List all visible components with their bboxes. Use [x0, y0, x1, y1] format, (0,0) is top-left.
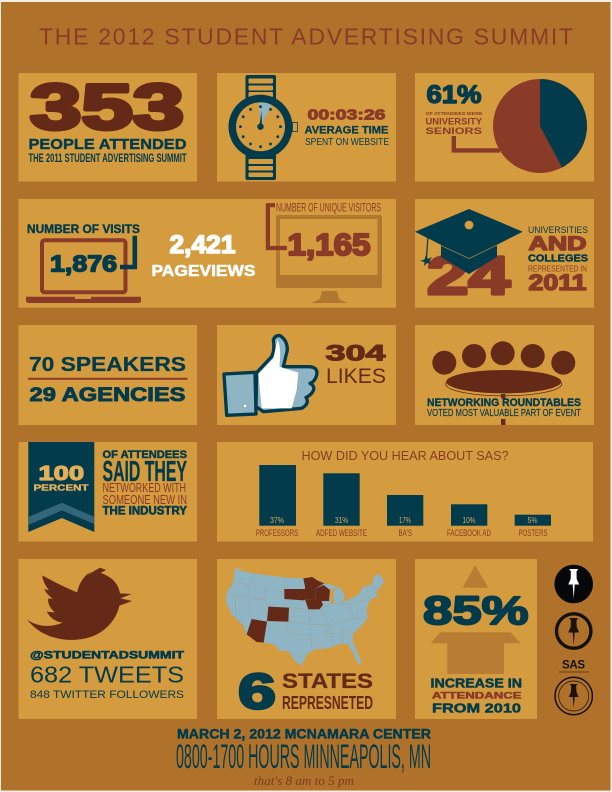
number of unique visitors: NUMBER OF UNIQUE VISITORS [276, 202, 381, 214]
someone new in: SOMEONE NEW IN [102, 493, 187, 507]
map: united states [226, 568, 384, 666]
icon: ring pin badge [556, 614, 591, 648]
icon: graduation cap [415, 209, 523, 274]
panel: attendance [18, 71, 197, 182]
bar: professors: 37% [270, 516, 284, 525]
and: AND [528, 234, 586, 255]
icon: laptop [26, 240, 141, 303]
bar: adfed website: 31% [335, 516, 348, 525]
panel: likes [217, 325, 396, 425]
sas label: SAS [562, 659, 585, 671]
footer: date and venue: MARCH 2, 2012 MCNAMARA CENTER [177, 726, 431, 741]
85 percent: 85% [423, 589, 528, 633]
icon: arrow body [431, 632, 521, 674]
likes: LIKES [326, 365, 386, 388]
said they: SAID THEY [102, 456, 187, 488]
percent: PERCENT [34, 482, 90, 492]
2011: 2011 [528, 270, 586, 295]
bar: ba's: BA'S [398, 528, 412, 538]
bar: ba's [387, 495, 423, 538]
spent on website: SPENT ON WEBSITE [305, 137, 389, 148]
from 2010: FROM 2010 [432, 700, 521, 715]
visits value: 1,876 [50, 250, 117, 276]
time value: 00:03:26 [308, 108, 386, 124]
twitter handle: @STUDENTADSUMMIT [30, 650, 184, 662]
bar: professors: PROFESSORS [256, 528, 298, 538]
title: THE 2012 STUDENT ADVERTISING SUMMIT [39, 24, 573, 50]
seniors: SENIORS [426, 126, 482, 137]
bar: posters: POSTERS [518, 528, 548, 538]
pointer bracket [454, 136, 500, 150]
footer: note: that's 8 am to 5 pm [254, 773, 354, 788]
panel: universities and colleges [415, 199, 594, 308]
number 24: 24 [427, 246, 510, 306]
icon: thumbs up [224, 336, 317, 415]
100: 100 [38, 463, 84, 485]
panel: twitter [18, 559, 197, 719]
represented in: REPRESENTED IN [528, 264, 587, 274]
pageviews value: 2,421 [170, 231, 236, 259]
chart title: HOW DID YOU HEAR ABOUT SAS? [302, 449, 509, 463]
icon: arrow tip [463, 565, 488, 588]
attendance: ATTENDANCE [432, 690, 522, 700]
pageviews label: PAGEVIEWS [152, 263, 256, 280]
of attendees were: OF ATTENDEES WERE [426, 111, 483, 117]
panel: networking roundtables [415, 325, 594, 425]
70 speakers: 70 SPEAKERS [29, 353, 186, 376]
bar: facebook ad: 10% [462, 516, 476, 525]
people attended: PEOPLE ATTENDED [28, 136, 187, 153]
colleges: COLLEGES [528, 253, 588, 265]
networking roundtables: NETWORKING ROUNDTABLES [427, 397, 581, 409]
bar: adfed website: ADFED WEBSITE [316, 528, 367, 538]
icon: monitor [276, 215, 382, 303]
panel: average time [217, 73, 396, 182]
panel: attendance increase [415, 559, 537, 719]
visits bracket [120, 236, 135, 267]
panel: how did you hear bar chart [217, 442, 593, 542]
848 twitter followers: 848 TWITTER FOLLOWERS [30, 689, 184, 701]
states: STATES [282, 669, 373, 693]
ribbon [28, 442, 94, 532]
increase in: INCREASE IN [430, 676, 522, 690]
universities: UNIVERSITIES [528, 225, 588, 236]
number 6: 6 [238, 664, 276, 720]
29 agencies: 29 AGENCIES [30, 385, 186, 406]
number of visits: NUMBER OF VISITS [27, 222, 140, 236]
bar: adfed website [316, 473, 367, 538]
panel: web traffic [18, 199, 396, 308]
icon: twitter bird [27, 568, 132, 640]
bar: posters: 5% [528, 516, 538, 525]
university: UNIVERSITY [426, 116, 483, 128]
bar: ba's: 17% [399, 516, 411, 525]
subtitle: THE 2011 STUDENT ADVERTISING SUMMIT [28, 153, 186, 165]
represneted: REPRESNETED [282, 692, 373, 713]
panel: 100 percent networked [18, 442, 197, 542]
pie chart [493, 79, 587, 173]
panel: university seniors [415, 73, 594, 182]
unique visitors value: 1,165 [288, 227, 370, 262]
bar: facebook ad: FACEBOOK AD [447, 528, 491, 538]
panel: speakers and agencies [18, 325, 197, 425]
bar: facebook ad [447, 504, 491, 538]
682 tweets: 682 TWEETS [30, 662, 184, 688]
icon: double ring pin badge [555, 677, 592, 715]
the industry: THE INDUSTRY [102, 506, 187, 518]
unique visitors bracket [268, 205, 287, 248]
big number 353: 353 [30, 71, 184, 143]
icon: black pin badge [554, 565, 593, 603]
bar: professors [256, 465, 298, 538]
panel: states represented [217, 559, 396, 720]
average time: AVERAGE TIME [304, 124, 388, 136]
networked with: NETWORKED WITH [102, 481, 186, 495]
icon: wristwatch [228, 75, 298, 180]
of attendees: OF ATTENDEES [102, 449, 187, 461]
bar: posters [515, 515, 551, 538]
61 percent: 61% [426, 81, 482, 109]
icon: round table with people [432, 341, 575, 425]
304: 304 [326, 340, 386, 366]
sas label [559, 659, 589, 673]
